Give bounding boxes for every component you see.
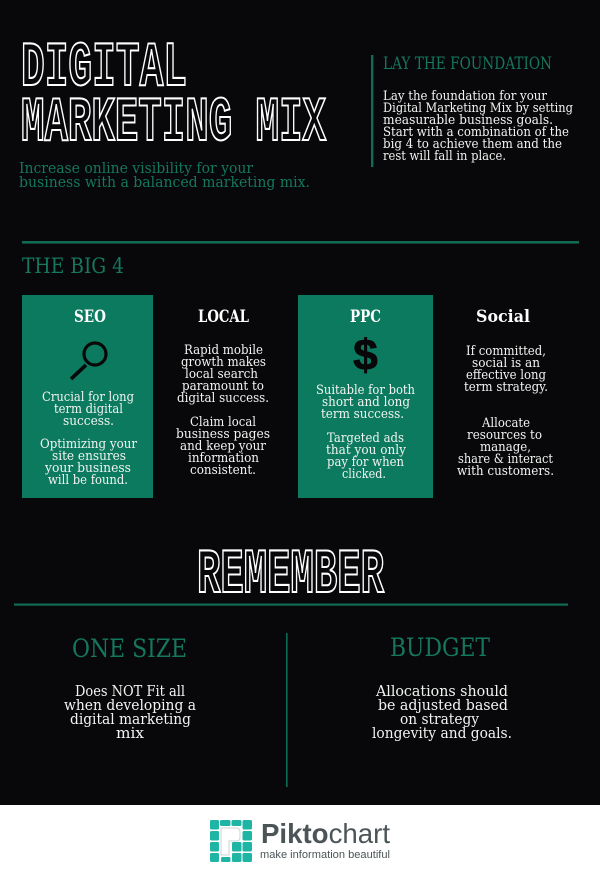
- LOCAL text: business pages: [176, 427, 270, 442]
- LOCAL text: consistent.: [190, 463, 256, 478]
- SEO text: your business: [44, 461, 131, 476]
- heading: the big 4: THE BIG 4: [22, 254, 124, 279]
- foundation text: [383, 89, 573, 164]
- budget text: [372, 684, 512, 742]
- title: MARKETING MIX: [21, 88, 326, 159]
- PPC text: [316, 383, 415, 482]
- foundation text: Digital Marketing Mix by setting: [383, 101, 573, 116]
- Social text: effective long: [466, 368, 546, 383]
- LOCAL text: and keep your: [180, 439, 267, 454]
- subtitle: business with a balanced marketing mix.: [19, 173, 310, 191]
- panel: SEO: [22, 295, 153, 498]
- PPC text: short and long: [322, 395, 410, 410]
- PPC text: clicked.: [342, 467, 386, 482]
- Social text: Allocate: [481, 416, 530, 431]
- Social text: resources to: [467, 428, 542, 443]
- SEO text: Crucial for long: [42, 390, 134, 405]
- LOCAL text: Rapid mobile: [184, 343, 263, 358]
- title: [21, 33, 326, 159]
- PPC text: term success.: [321, 407, 404, 422]
- PPC text: Suitable for both: [316, 383, 415, 398]
- Social text: manage,: [480, 440, 531, 455]
- one size text: digital marketing: [70, 712, 191, 728]
- SEO text: Optimizing your: [40, 437, 138, 452]
- PPC text: that you only: [326, 443, 407, 458]
- SEO text: site ensures: [52, 449, 126, 464]
- budget heading: BUDGET: [390, 633, 490, 663]
- one size heading: ONE SIZE: [72, 634, 187, 664]
- panel: one size: [64, 634, 196, 742]
- subtitle: Increase online visibility for your: [19, 159, 254, 177]
- LOCAL text: digital success.: [177, 391, 269, 406]
- foundation text: rest will fall in place.: [383, 149, 506, 164]
- LOCAL heading: LOCAL: [198, 307, 249, 327]
- panel: budget: [372, 633, 512, 742]
- LOCAL text: local search: [185, 367, 258, 382]
- panel: lay the foundation: [371, 54, 573, 167]
- one size text: [64, 684, 196, 742]
- budget text: Allocations should: [375, 684, 508, 700]
- panel: Social: [457, 307, 554, 479]
- foundation text: Start with a combination of the: [383, 125, 569, 140]
- title: DIGITAL: [21, 33, 187, 104]
- subtitle: [19, 159, 310, 191]
- footer: [0, 805, 600, 878]
- foundation text: big 4 to achieve them and the: [383, 137, 562, 152]
- one size text: mix: [116, 726, 144, 742]
- piktochart wordmark: Piktochart: [261, 818, 390, 849]
- SEO text: will be found.: [48, 473, 128, 488]
- Social text: [457, 344, 554, 479]
- PPC text: Targeted ads: [327, 431, 404, 446]
- foundation heading: LAY THE FOUNDATION: [383, 54, 552, 73]
- Social text: social is an: [472, 356, 540, 371]
- SEO text: [40, 390, 138, 488]
- heading: remember: REMEMBER: [197, 540, 384, 611]
- SEO text: term digital: [54, 402, 123, 417]
- piktochart wordmark: make information beautiful: [260, 849, 390, 861]
- Social text: with customers.: [457, 464, 554, 479]
- LOCAL text: paramount to: [182, 379, 264, 394]
- LOCAL text: information: [188, 451, 259, 466]
- panel: LOCAL: [176, 307, 270, 478]
- budget text: longevity and goals.: [372, 726, 512, 742]
- LOCAL text: [176, 343, 270, 478]
- icon: magnifying glass: [71, 343, 106, 379]
- one size text: Does NOT Fit all: [75, 684, 185, 700]
- Social heading: Social: [476, 307, 530, 327]
- LOCAL text: Claim local: [190, 415, 256, 430]
- PPC heading: PPC: [350, 307, 381, 327]
- foundation text: measurable business goals.: [383, 113, 553, 128]
- foundation text: Lay the foundation for your: [383, 89, 548, 104]
- panel: PPC: [298, 295, 433, 498]
- Social text: If committed,: [466, 344, 546, 359]
- Social text: term strategy.: [464, 380, 548, 395]
- one size text: when developing a: [64, 698, 196, 714]
- budget text: on strategy: [400, 712, 480, 728]
- LOCAL text: growth makes: [181, 355, 266, 370]
- icon: piktochart logo: [210, 820, 252, 862]
- Social text: share & interact: [458, 452, 554, 467]
- icon: dollar sign: $: [353, 331, 378, 380]
- budget text: be adjusted based: [378, 698, 508, 714]
- SEO heading: SEO: [74, 307, 106, 327]
- PPC text: pay for when: [327, 455, 404, 470]
- SEO text: success.: [63, 414, 114, 429]
